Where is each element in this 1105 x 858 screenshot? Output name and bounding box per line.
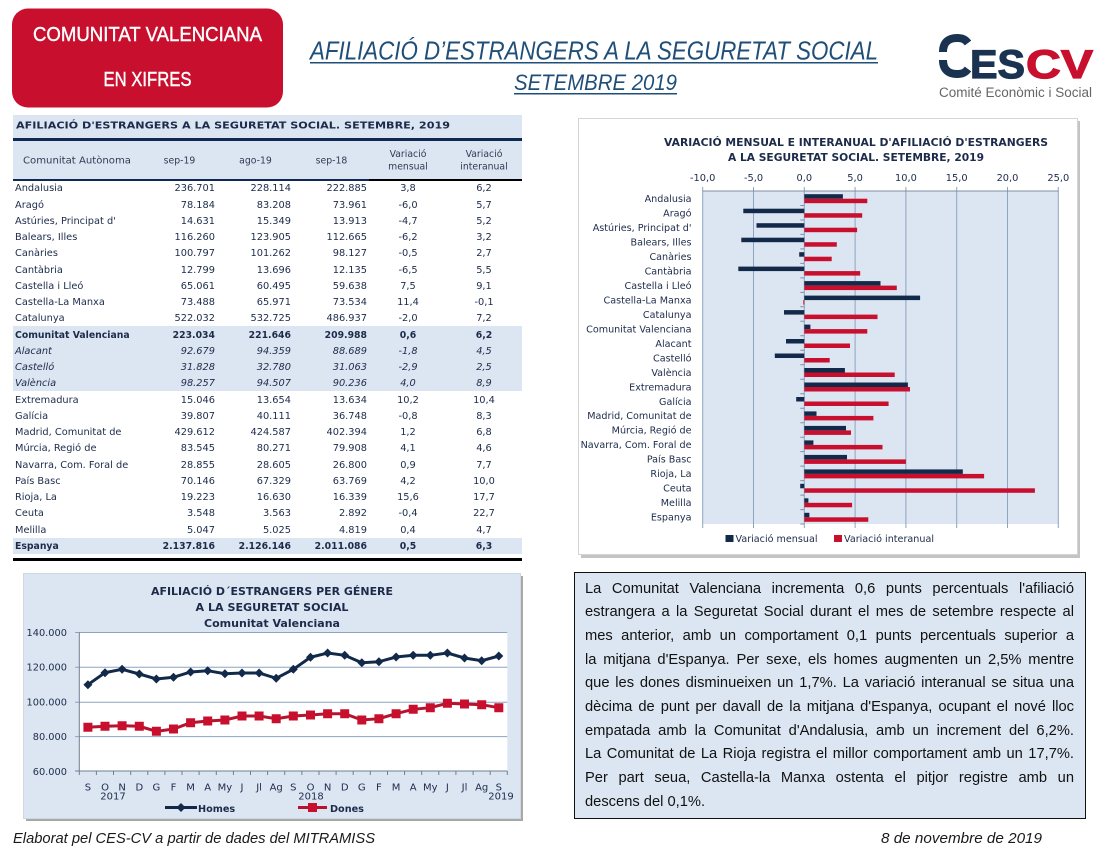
bar chart category labels: Astúries, Principat d' [593,222,692,234]
data table: 5,2 [476,216,492,227]
data table: 4,6 [476,443,492,454]
data table: Aragó [15,200,44,211]
data table: Múrcia, Regió de [15,443,97,454]
table heading band: ago-19 [239,156,272,166]
data table: 67.329 [257,476,291,487]
data table: 2,5 [476,362,492,373]
data table: 19.223 [181,492,215,503]
data table: 28.855 [181,460,215,471]
line chart heading: A LA SEGURETAT SOCIAL [196,602,349,614]
panel: bar chart variació mensual e interanual [578,118,1080,558]
bar chart category labels: Balears, Illes [630,238,692,248]
data table: 532.725 [250,313,291,324]
bar chart category labels: Castelló [653,352,692,364]
bar chart heading: VARIACIÓ MENSUAL E INTERANUAL D'AFILIACIÓ D'ESTRANGERS [664,136,1048,149]
data table: -0,8 [398,411,418,422]
line chart x axis labels: S [496,782,502,794]
data table: 79.908 [333,443,367,454]
data table: 2.892 [339,508,367,519]
data table: 39.807 [181,411,215,422]
data table: 98.257 [181,378,215,389]
data table: 31.063 [333,362,367,373]
bar chart legend: Variació mensual [736,533,818,545]
data table: 80.271 [257,443,291,454]
data table: Ceuta [15,508,44,519]
data table: 12.799 [181,265,215,276]
bars: variació mensual [738,194,963,517]
line chart x axis labels: D [135,782,143,794]
text block: analysis: empatada amb la Comunitat d'Andalusia, amb un increment del 6,2%. [585,723,1074,739]
table heading band: Variació [466,149,503,160]
data table: 13.634 [333,395,367,406]
bar chart category labels: Melilla [661,498,692,509]
bar chart category labels: Espanya [651,513,692,524]
data table: 100.797 [174,248,215,259]
bar chart top axis labels: 10,0 [895,173,917,184]
data table: 7,7 [476,460,492,471]
line chart x axis labels: Ag [475,782,488,794]
data table: 223.034 [173,330,215,341]
footer: date: 8 de novembre de 2019 [881,831,1042,847]
bar chart category labels: Extremadura [629,382,692,393]
line chart heading: Comunitat Valenciana [204,618,340,630]
data table: Astúries, Principat d' [15,216,116,227]
data table: 14.631 [181,216,215,227]
bar chart heading [664,136,1048,164]
line chart x axis labels: A [410,782,417,794]
bar chart category labels: Ceuta [663,484,692,495]
data table: 6,2 [476,330,492,341]
bar chart top axis labels: 0,0 [797,173,812,184]
data table: 10,0 [473,476,495,487]
line chart x axis labels: O [101,782,109,794]
data table: 486.937 [326,313,367,324]
bar chart category labels: Comunitat Valenciana [586,324,692,335]
data table: 5.025 [263,525,291,536]
data table: 16.630 [257,492,291,503]
data table: 6,8 [476,427,492,438]
data table: 70.146 [181,476,215,487]
line chart x axis labels: N [324,782,331,794]
data table: 3,8 [400,183,416,194]
data table: 28.605 [257,460,291,471]
data table: 73.534 [333,297,367,308]
text block: analysis: La Comunitat Valenciana incrementa 0,6 punts percentuals l'afiliació [585,580,1074,596]
line chart x axis labels: G [358,782,366,794]
data table: 5,5 [476,265,492,276]
data table: 7,2 [476,313,492,324]
data table: 40.111 [257,411,291,422]
bar chart top axis labels: 15,0 [946,173,968,184]
data table: 5.047 [187,525,215,536]
badge: Comunitat Valenciana en xifres [12,8,283,108]
data table: Extremadura [15,395,79,406]
data table: 4,5 [476,346,492,357]
data table: 429.612 [174,427,215,438]
data table: Castella-La Manxa [15,297,105,308]
line chart y axis labels: 100.000 [26,698,67,708]
line chart legend [165,803,364,815]
data table: 3,2 [476,232,492,243]
bar chart category labels: València [651,367,692,379]
data table: 31.828 [181,362,215,373]
line chart y axis labels [26,628,67,778]
data table: 0,9 [400,460,416,471]
text block: analysis: dècima de punt per davall de la mitjana d'Espanya, ocupant el nové lloc [585,699,1074,715]
data table: Andalusia [15,183,63,194]
bar chart category labels: Galícia [659,396,692,408]
data table: 22,7 [473,508,495,519]
data table: 98.127 [333,248,367,259]
data table: 36.748 [333,411,367,422]
bar chart category labels: País Basc [647,454,692,466]
data table: Cantàbria [15,265,63,276]
table heading band: mensual [388,162,428,172]
bar chart category labels: Navarra, Com. Foral de [581,440,692,451]
data table: 15.046 [181,395,215,406]
data table: València [15,378,56,389]
footer: source: Elaborat pel CES-CV a partir de dades del MITRAMISS [13,831,375,847]
line chart heading [151,585,393,630]
data table: 6,3 [476,541,492,552]
data table: 4.819 [339,525,367,536]
data table: 209.988 [325,330,367,341]
bars: variació interanual [803,199,1035,522]
bar chart category labels: Alacant [655,339,692,350]
line chart y axis labels: 60.000 [33,767,67,778]
bar chart top axis labels: 20,0 [997,173,1018,184]
bar chart top axis labels: 25,0 [1047,173,1069,184]
line chart x axis labels: 2019 [488,792,514,802]
bar chart category labels: Catalunya [643,310,692,321]
bar chart category labels: Castella i Lleó [624,280,692,292]
table heading band: Comunitat Autònoma [23,156,131,166]
data table: Galícia [15,411,48,422]
data table: Catalunya [15,313,65,324]
data table: 10,2 [397,395,419,406]
data table: 4,2 [400,476,416,487]
data table: 13.696 [257,265,291,276]
line chart x axis labels: N [118,782,126,794]
data table: País Basc [15,476,61,487]
title [308,36,878,95]
line chart x axis labels: J [445,782,449,794]
bar chart top axis labels: 5,0 [847,173,863,184]
data table: 65.061 [181,281,215,292]
line chart x axis labels: M [392,782,400,794]
line chart x axis labels: A [204,782,211,794]
line chart x axis labels: Jl [255,782,262,794]
bar chart category labels: Cantàbria [645,265,692,277]
line chart x axis labels: Ag [270,782,283,794]
table heading band [13,115,522,181]
data table: Alacant [15,346,52,357]
line chart x axis labels: My [218,782,232,794]
text block: analysis: la mitjana d'Espanya. Per sexe, els homes augmenten un 2,5% mentre [585,652,1074,668]
data table: 101.262 [250,248,291,259]
bar chart category labels: Canàries [649,251,692,263]
data table: 424.587 [250,427,291,438]
bar chart plot background and grid [703,187,1058,528]
data table: 59.638 [333,281,367,292]
text block: analysis: que les dones disminueixen un 1,7%. La variació interanual se situa una [585,675,1074,691]
logo: CES CV: CV [1026,43,1093,87]
data table: 123.905 [250,232,291,243]
data table: 8,9 [476,378,492,389]
line chart y axis labels: 80.000 [33,732,67,743]
data table: -0,1 [474,297,494,308]
text block: analysis: La Comunitat de La Rioja registra el millor comportament amb un 17,7%. [585,746,1074,762]
bar chart heading: A LA SEGURETAT SOCIAL. SETEMBRE, 2019 [728,152,984,164]
data table: 112.665 [326,232,367,243]
data table: -2,9 [398,362,418,373]
table heading band: sep-19 [164,156,195,166]
data table: Castella i Lleó [15,281,83,292]
data table: 15,6 [397,492,419,503]
table heading band: interanual [460,162,508,172]
data table: 7,5 [400,281,416,292]
data table: 90.236 [333,378,367,389]
data table: 221.646 [249,330,291,341]
data table: 60.495 [257,281,291,292]
data table: 0,4 [400,525,416,536]
line chart x axis labels: 2018 [298,792,324,802]
text block: analysis: descens del 0,1%. [585,794,705,810]
line chart x axis labels: F [376,782,382,794]
logo: CES CV [939,38,1093,100]
data table: 15.349 [257,216,291,227]
data table: Comunitat Valenciana [15,330,130,341]
line chart x axis labels: F [171,782,177,794]
bar chart category labels: Aragó [663,208,692,220]
text block: analysis [574,572,1086,819]
data table: 4,1 [400,443,416,454]
data table: 9,1 [476,281,492,292]
data table: 73.961 [333,200,367,211]
data table: 73.488 [181,297,215,308]
data table: 13.654 [257,395,291,406]
badge: Comunitat Valenciana en xifres: COMUNITAT VALENCIANA [33,24,263,46]
line chart x axis labels: G [153,782,160,794]
data table: 222.885 [326,183,367,194]
bar chart top axis labels: -5,0 [744,173,763,184]
data table: -1,8 [398,346,418,357]
data table: Rioja, La [15,492,57,503]
line series: Dones [83,699,503,736]
data table: 83.208 [257,200,291,211]
line chart x axis labels: D [341,782,349,794]
data table: -6,0 [398,200,418,211]
data table: -6,5 [398,265,418,276]
data table: 2,7 [476,248,492,259]
data table: 228.114 [250,183,291,194]
data table: 10,4 [473,395,495,406]
data table: 236.701 [174,183,215,194]
data table: 6,2 [476,183,492,194]
badge: Comunitat Valenciana en xifres: EN XIFRES [104,69,192,91]
data table: 12.135 [333,265,367,276]
data table: 3.548 [187,508,215,519]
data table: 32.780 [257,362,291,373]
line chart plot and grid [75,632,507,775]
data table: Canàries [15,248,58,259]
bar chart category labels: Múrcia, Regió de [612,425,692,437]
data table: 8,3 [476,411,492,422]
line chart y axis labels: 140.000 [26,628,67,639]
data table: Navarra, Com. Foral de [15,460,128,471]
data table: 522.032 [174,313,215,324]
logo: CES CV: Comité Econòmic i Social [939,85,1092,100]
data table: 2.126.146 [239,541,291,552]
data table: -2,0 [398,313,418,324]
line chart x axis labels: 2017 [100,792,126,802]
bar chart category labels: Castella-La Manxa [604,295,692,306]
bar chart top axis labels: -10,0 [690,173,715,184]
data table: 92.679 [181,346,215,357]
line chart y axis labels: 120.000 [26,662,67,674]
data table: Espanya [15,541,59,552]
data table: 2.011.086 [315,541,367,552]
data table: -0,5 [398,248,418,259]
data table: 11,4 [397,297,419,308]
data table: -6,2 [398,232,418,243]
data table: 0,6 [400,330,416,341]
data table: Balears, Illes [15,232,77,243]
table heading band: sep-18 [316,156,347,166]
bar chart category labels: Andalusia [645,194,692,205]
data table: Madrid, Comunitat de [15,427,121,438]
line chart x axis labels: O [307,782,315,794]
data table: -4,7 [398,216,418,227]
data table: 94.507 [257,378,291,389]
data table: 83.545 [181,443,215,454]
data table: 26.800 [333,460,367,471]
data table: 78.184 [181,200,215,211]
line chart x axis labels: S [290,782,296,794]
data table: 0,5 [400,541,416,552]
data table: 4,7 [476,525,492,536]
bar chart top axis labels [690,173,1069,184]
title: AFILIACIÓ D’ESTRANGERS A LA SEGURETAT SOCIAL [308,36,878,66]
bar chart legend [726,533,934,545]
data table: 3.563 [263,508,291,519]
table heading band: Variació [390,149,427,160]
data table [13,183,522,554]
line chart legend: Homes [198,804,235,815]
line chart x axis labels: S [85,782,91,794]
line chart x axis labels: Jl [461,782,467,794]
data table: Melilla [15,525,46,536]
text block: analysis: mes anterior, amb un comportament 0,1 punts percentuals superior a [585,628,1074,644]
data table: -0,4 [398,508,418,519]
line chart x axis labels: J [240,782,243,794]
data table: 88.689 [333,346,367,357]
line chart x axis labels [85,782,514,802]
panel: line chart afiliació per gènere [24,574,523,821]
data table: Castelló [15,362,54,373]
data table: 5,7 [476,200,492,211]
table bottom rule [13,558,522,561]
bar chart legend: Variació interanual [844,533,934,545]
line chart x axis labels: My [423,782,438,794]
text block: analysis: estrangera a la Seguretat Social durant el mes de setembre respecte al [585,604,1074,620]
line chart heading: AFILIACIÓ D´ESTRANGERS PER GÉNERE [151,585,393,598]
data table: 17,7 [473,492,495,503]
data table: 4,0 [400,378,416,389]
data table: 94.359 [257,346,291,357]
line chart x axis labels: M [186,782,195,794]
data table: 2.137.816 [163,541,215,552]
data table: 1,2 [400,427,416,438]
data table: 16.339 [333,492,367,503]
bar chart category labels: Madrid, Comunitat de [587,411,692,422]
line chart legend: Dones [330,804,364,815]
table heading band: AFILIACIÓ D'ESTRANGERS A LA SEGURETAT SOCIAL. SETEMBRE, 2019 [16,118,450,132]
bar chart category labels: Rioja, La [650,469,692,480]
data table: 13.913 [333,216,367,227]
text block: analysis: Per part seua, Castella-la Manxa ostenta el pitjor registre amb un [585,770,1074,786]
title: SETEMBRE 2019 [514,70,677,95]
data table: 63.769 [333,476,367,487]
data table: 116.260 [174,232,215,243]
line series: Homes [83,648,503,689]
data table: 65.971 [257,297,291,308]
logo: CES CV: ES [970,43,1025,87]
data table: 402.394 [326,427,367,438]
bar chart category labels [581,194,692,524]
